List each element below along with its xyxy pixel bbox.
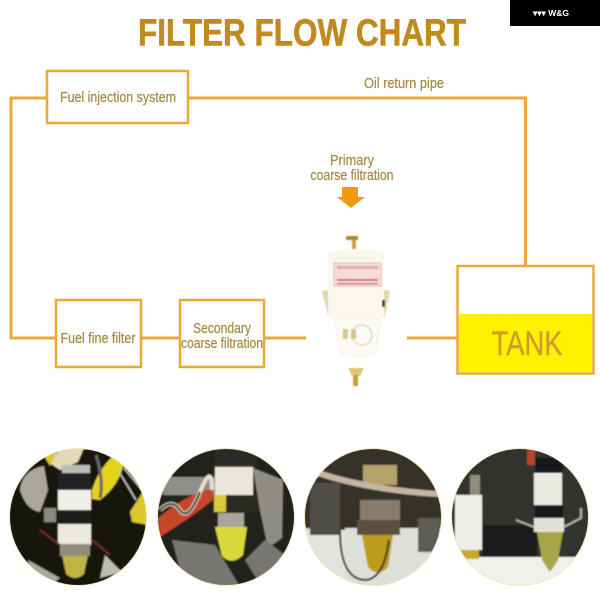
photo 1: [8, 447, 148, 587]
label: primary coarse filtration: coarse filtration: [310, 167, 394, 184]
label: oil return pipe: Oil return pipe: [364, 75, 444, 92]
title: FILTER FLOW CHART: [138, 12, 466, 54]
flow pipes: [11, 98, 526, 338]
box: secondary coarse filtration: [180, 300, 264, 367]
label: primary coarse filtration: Primary: [330, 152, 374, 169]
tank: TANK: [492, 325, 563, 363]
tank: [458, 266, 594, 374]
box: fuel fine filter: Fuel fine filter: [60, 330, 136, 347]
box: secondary coarse filtration: Secondary: [193, 320, 251, 337]
label: primary coarse filtration: [310, 152, 394, 184]
box: secondary coarse filtration: coarse filtration: [181, 335, 263, 352]
photo 3: [304, 447, 444, 588]
photo 2: [157, 447, 297, 587]
photo 4: [451, 447, 591, 588]
filter product image: [322, 236, 390, 386]
box: fuel fine filter: [56, 300, 141, 367]
box: fuel injection system: [47, 71, 188, 123]
brand badge: ▾▾▾ W&G: [532, 8, 569, 18]
box: fuel injection system: Fuel injection system: [60, 89, 176, 106]
arrow: down into filter: [337, 187, 365, 208]
brand badge: [510, 0, 600, 26]
